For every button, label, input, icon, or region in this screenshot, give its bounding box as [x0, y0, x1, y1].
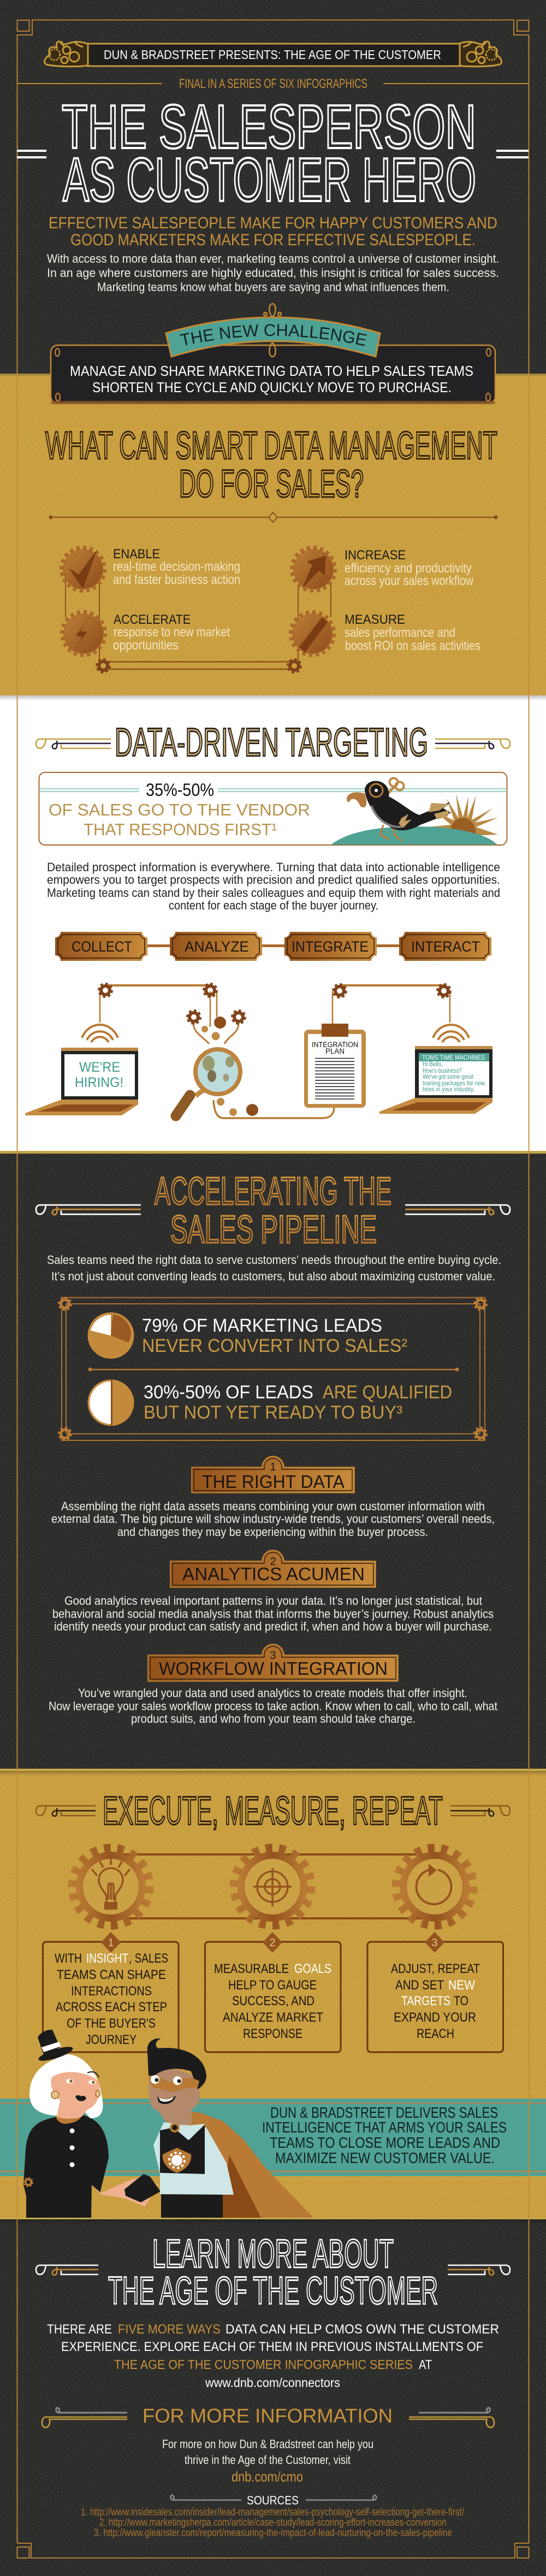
badge: 2 analytics acumen: ANALYTICS ACUMEN: [182, 1564, 365, 1584]
badge: 1 the right data: [192, 1456, 354, 1493]
gears on pulley: [99, 984, 450, 1024]
ornament: learn more left scroll: [36, 2265, 98, 2275]
button: integrate: INTEGRATE: [292, 938, 369, 955]
ribbon: the new challenge: [165, 303, 381, 358]
gear: insight: [72, 1848, 150, 1925]
icon: sunburst: [428, 794, 498, 836]
divider with diamond: [49, 512, 498, 522]
button: interact: [399, 932, 491, 961]
laptop: hiring: [25, 1048, 138, 1115]
panel: step 1: TEAMS CAN SHAPE: [57, 1968, 166, 1982]
badge: 3 workflow integration: WORKFLOW INTEGRATION: [159, 1658, 388, 1679]
subheading: EFFECTIVE SALESPEOPLE MAKE FOR HAPPY CUSTOMERS AND: [49, 214, 497, 232]
intro text: With access to more data than ever, marketing teams control a universe of customer insight.: [47, 252, 499, 265]
text: analytics acumen: [52, 1594, 494, 1633]
panel: new challenge box: MANAGE AND SHARE MARKETING DATA TO HELP SALES TEAMS: [70, 363, 473, 379]
text: data-driven description: Detailed prospect information is everywhere. Turning that data into actionable intelligence: [47, 860, 500, 874]
item: measure: [345, 612, 480, 653]
icon: integration plan clipboard: PLAN: [325, 1047, 345, 1055]
text: five more ways: [47, 2322, 499, 2390]
button: collect: [55, 932, 147, 961]
chart: half pie: [87, 1380, 134, 1426]
laptop: email: hires in your industry.: [423, 1085, 474, 1093]
panel: step 2: GOALS: [294, 1961, 331, 1976]
panel: step 3: [367, 1932, 503, 2052]
panel: step 3: NEW: [448, 1978, 475, 1993]
text: delivers sales intelligence: TEAMS TO CLOSE MORE LEADS AND: [270, 2134, 500, 2151]
section: dark pipeline background: [0, 1151, 546, 1770]
text: more information: thrive in the Age of the Customer, visit: [185, 2453, 351, 2467]
stat: 79 percent: 79% OF MARKETING LEADS: [142, 1315, 382, 1336]
stat: 30 to 50 percent: [144, 1382, 452, 1423]
gear icon: increase: [292, 548, 335, 590]
section: white targeting background: [0, 695, 546, 1152]
item: measure: sales performance and: [345, 625, 455, 640]
frame gear bottom-right: [474, 1428, 486, 1440]
panel: step 1: INSIGHT: [86, 1951, 128, 1966]
heading: accelerating the sales pipeline: [155, 1170, 391, 1251]
laptop: email: [379, 1046, 492, 1114]
panel: step 1: 1: [108, 1937, 114, 1949]
heading: sources: [171, 2494, 376, 2507]
icon: integration plan clipboard: INTEGRATION: [312, 1041, 358, 1049]
laptop: email: How's business?: [423, 1067, 462, 1074]
text: data-driven description: Marketing teams can stand by their sales colleagues and equip them with right materials and: [47, 886, 500, 900]
section: dark footer background: [0, 2218, 546, 2576]
item: accelerate: response to new market: [114, 625, 230, 640]
panel: vendor statistic: THAT RESPONDS FIRST¹: [84, 820, 277, 839]
panel: step 3: REACH: [417, 2026, 454, 2041]
text: more information: For more on how Dun & Bradstreet can help you: [162, 2437, 373, 2451]
ornament: more information rules: [42, 2408, 494, 2427]
text: data-driven description: [47, 860, 500, 912]
text: more information: [162, 2437, 373, 2485]
ornament: execute left scroll: [36, 1806, 96, 1816]
laptop: hiring: WE'RE: [79, 1060, 120, 1075]
icon: magnifying glass: [176, 1049, 240, 1116]
button: collect: COLLECT: [72, 938, 132, 955]
frame gear bottom-left: [59, 1428, 71, 1440]
text: analytics acumen: behavioral and social media analysis that that informs the buyer’s journey. Robust analytics: [52, 1607, 494, 1621]
stat: 30 to 50 percent: 30%-50% OF LEADS: [144, 1382, 313, 1403]
panel: new challenge box: SHORTEN THE CYCLE AND QUICKLY MOVE TO PURCHASE.: [92, 379, 452, 395]
section: dark header background: [0, 0, 546, 375]
heading: accelerating the sales pipeline: ACCELERATING THE: [155, 1170, 391, 1213]
text: delivers sales intelligence: MAXIMIZE NEW CUSTOMER VALUE.: [275, 2149, 495, 2166]
pulley lines: [100, 985, 450, 1118]
icon: balls below magnifier: [217, 1098, 258, 1116]
belts between large gears: [111, 1853, 435, 1919]
panel: step 2: [205, 1932, 341, 2052]
item: accelerate: [113, 612, 230, 653]
gear: target: [234, 1848, 311, 1925]
text: five more ways: DATA CAN HELP CMOS OWN THE CUSTOMER: [225, 2322, 499, 2337]
intro text: Marketing teams know what buyers are saying and what influences them.: [97, 280, 449, 294]
item: enable: [113, 547, 240, 587]
panel: step 3: AND SET: [395, 1978, 444, 1993]
subheading: GOOD MARKETERS MAKE FOR EFFECTIVE SALESPEOPLE.: [70, 231, 476, 249]
panel: lead statistics frame: [62, 1298, 485, 1440]
laptop: hiring: HIRING!: [75, 1075, 123, 1090]
icon: signal left: [82, 1025, 118, 1042]
text: the right data: Assembling the right data assets means combining your own customer information with: [61, 1499, 485, 1513]
frame gear top-left: [59, 1298, 71, 1310]
icon: balls above magnifier: [201, 1017, 226, 1040]
text: the right data: and changes they may be experiencing within the buyer process.: [117, 1525, 428, 1539]
icon: clockwork bird: [347, 778, 451, 841]
text: five more ways: AT: [419, 2358, 432, 2372]
badge: 2 analytics acumen: [170, 1550, 376, 1587]
ornament: execute right scroll: [450, 1806, 510, 1816]
series note with side rules: FINAL IN A SERIES OF SIX INFOGRAPHICS: [179, 76, 367, 91]
heading: sources: SOURCES: [247, 2494, 299, 2507]
item: increase: INCREASE: [345, 548, 406, 563]
panel: vendor statistic: OF SALES GO TO THE VENDOR: [49, 800, 310, 819]
intro text: [47, 252, 499, 294]
text: workflow integration: product suits, and who from your team should take charge.: [131, 1712, 416, 1726]
panel: step 1: OF THE BUYER'S: [67, 2016, 156, 2031]
item: enable: ENABLE: [113, 547, 160, 562]
text: source links: [81, 2507, 465, 2539]
icon: integration plan clipboard: [304, 1024, 366, 1108]
ornament: pipeline left scroll: [36, 1205, 141, 1215]
section: gold smart data background: [0, 374, 546, 696]
connector bars between process buttons: [146, 944, 400, 947]
ornament: left floral banner end: [44, 41, 87, 67]
text: pipeline intro: It’s not just about converting leads to customers, but also about maximizing customer value.: [51, 1269, 495, 1283]
panel: step 2: 2: [269, 1937, 276, 1949]
stat: 79 percent: [142, 1315, 407, 1356]
text: analytics acumen: identify needs your product can satisfy and predict if, when and how a buyer will purchase.: [54, 1620, 492, 1633]
text: analytics acumen: Good analytics reveal important patterns in your data. It’s no longer just statistical, but: [64, 1594, 482, 1608]
panel: step 3: ADJUST, REPEAT: [391, 1961, 480, 1976]
button: analyze: [170, 932, 262, 961]
item: accelerate: opportunities: [113, 638, 179, 653]
badge: 2 analytics acumen: 2: [270, 1556, 276, 1568]
badge: 1 the right data: THE RIGHT DATA: [202, 1472, 345, 1492]
item: measure: boost ROI on sales activities: [345, 639, 480, 653]
text: workflow integration: Now leverage your sales workflow process to take action. Know when to call, who to call, what: [49, 1699, 497, 1713]
laptop: email: Hi Bello,: [423, 1060, 443, 1068]
text: five more ways: EXPERIENCE. EXPLORE EACH OF THEM IN PREVIOUS INSTALLMENTS OF: [61, 2339, 483, 2354]
text: data-driven description: content for each stage of the buyer journey.: [169, 899, 378, 912]
text: five more ways: FIVE MORE WAYS: [118, 2322, 221, 2337]
frame gear top-right: [474, 1298, 486, 1310]
ribbon: the new challenge: THE NEW CHALLENGE: [179, 324, 367, 346]
laptop: email: TOMS TIME MACHINES: [422, 1054, 485, 1061]
gear icon: accelerate: [62, 612, 105, 655]
title: [62, 92, 476, 214]
panel: step 2: ANALYZE MARKET: [223, 2010, 323, 2025]
item: enable: real-time decision-making: [113, 559, 240, 574]
panel: vendor statistic: [39, 772, 507, 845]
laptop: email: We've got some great: [423, 1073, 474, 1080]
panel: step 1: INTERACTIONS: [71, 1984, 152, 1999]
item: increase: across your sales workflow: [345, 574, 474, 588]
badge: 3 workflow integration: 3: [270, 1650, 276, 1662]
text: workflow integration: You’ve wrangled your data and used analytics to create models that offer insight.: [78, 1686, 467, 1700]
stat: 30 to 50 percent: ARE QUALIFIED: [323, 1382, 452, 1403]
text: source links: 3. http://www.gleanster.com/report/measuring-the-impact-of-lead-nurturing-on-the-sales-pipeline: [94, 2527, 452, 2539]
panel: step 1: , SALES: [129, 1951, 168, 1966]
ornament: data-driven left scroll: [36, 739, 111, 749]
text: more information: dnb.com/cmo: [232, 2468, 303, 2485]
text: delivers sales intelligence: [262, 2104, 507, 2166]
button: integrate: [284, 932, 377, 961]
panel: step 2: RESPONSE: [243, 2026, 302, 2041]
panel: new challenge box: [51, 345, 495, 404]
gear: repeat: [396, 1848, 473, 1925]
divider: [88, 1368, 459, 1371]
panel: step 1: JOURNEY: [86, 2033, 136, 2047]
small gear left: [97, 659, 110, 672]
stat: 30 to 50 percent: BUT NOT YET READY TO BUY³: [144, 1402, 402, 1423]
ornament: learn more right scroll: [448, 2265, 510, 2275]
panel: step 3: TARGETS: [401, 1994, 450, 2008]
heading: for more information: FOR MORE INFORMATION: [143, 2404, 393, 2427]
text: five more ways: THE AGE OF THE CUSTOMER INFOGRAPHIC SERIES: [114, 2358, 413, 2372]
text: the right data: external data. The big picture will show industry-wide trends, your customers’ overall needs,: [51, 1512, 495, 1526]
heading: what can smart data management do for sales: [45, 424, 497, 506]
item: enable: and faster business action: [113, 572, 240, 587]
panel: vendor statistic: 35%-50%: [146, 780, 214, 800]
panel: step 1: ACROSS EACH STEP: [56, 2000, 167, 2014]
text: pipeline intro: [47, 1253, 501, 1283]
badge: 3 workflow integration: [148, 1644, 398, 1681]
heading: accelerating the sales pipeline: SALES PIPELINE: [170, 1208, 377, 1251]
panel: step 3: TO: [454, 1994, 468, 2008]
text: source links: 2. http://www.marketingsherpa.com/article/case-study/lead-scoring-effort-increases-conversion: [99, 2517, 447, 2528]
illustration: hero with cape: [147, 2039, 313, 2218]
panel: step 2: HELP TO GAUGE: [228, 1978, 317, 1993]
item: measure: MEASURE: [345, 612, 405, 627]
text: the right data: [51, 1499, 495, 1539]
small gear right: [288, 659, 301, 672]
panel: step 1: [43, 1932, 179, 2052]
panel: step 2: MEASURABLE: [214, 1961, 289, 1976]
gear icon: enable: [62, 548, 104, 590]
ornament: right floral banner end: [459, 41, 502, 67]
panel: step 3: EXPAND YOUR: [394, 2010, 476, 2025]
subheading: [49, 214, 497, 249]
panel: step 2: SUCCESS, AND: [232, 1994, 314, 2008]
heading: what can smart data management do for sales: DO FOR SALES?: [179, 463, 364, 506]
text: pipeline intro: Sales teams need the right data to serve customers’ needs throughout the entire buying cycle.: [47, 1253, 501, 1267]
banner: presenter line: [88, 44, 460, 66]
icon: teal hill: [331, 826, 497, 844]
item: increase: [345, 548, 474, 588]
item: increase: efficiency and productivity: [345, 561, 472, 576]
item: accelerate: ACCELERATE: [114, 612, 191, 627]
banner: presenter line: DUN & BRADSTREET PRESENTS: THE AGE OF THE CUSTOMER: [104, 48, 441, 62]
chart: 79 percent pie: [87, 1312, 134, 1359]
stat: 79 percent: NEVER CONVERT INTO SALES²: [142, 1336, 407, 1356]
text: data-driven description: empowers you to target prospects with precision and predict qualified sales opportunities.: [47, 873, 500, 887]
section: teal band: [0, 2099, 546, 2176]
section: gold execute background: [0, 1769, 546, 2218]
laptop: email: training packages for new: [423, 1079, 485, 1087]
illustration: woman: [23, 2030, 161, 2218]
panel: step 1: WITH: [55, 1951, 82, 1966]
text: five more ways: www.dnb.com/connectors: [205, 2376, 340, 2390]
text: five more ways: THERE ARE: [47, 2322, 112, 2337]
badge: 1 the right data: 1: [270, 1461, 276, 1473]
panel: step 3: 3: [431, 1937, 438, 1949]
heading: learn more about the age of the customer: [108, 2232, 438, 2313]
intro text: In an age where customers are highly educated, this insight is critical for sales success.: [47, 266, 499, 280]
gear icon: measure: [291, 612, 334, 655]
ornament: data-driven right scroll: [435, 739, 510, 749]
connecting belts between gears: [66, 579, 331, 669]
button: analyze: ANALYZE: [185, 938, 249, 955]
text: workflow integration: [49, 1686, 497, 1726]
button: interact: INTERACT: [411, 938, 480, 955]
ornament: pipeline right scroll: [405, 1205, 510, 1215]
icon: signal right: [433, 1025, 469, 1042]
text: source links: 1. http://www.insidesales.com/insider/lead-management/sales-psychology-self-selectiong-get-there-first/: [81, 2507, 465, 2518]
title side bars: [17, 150, 529, 158]
